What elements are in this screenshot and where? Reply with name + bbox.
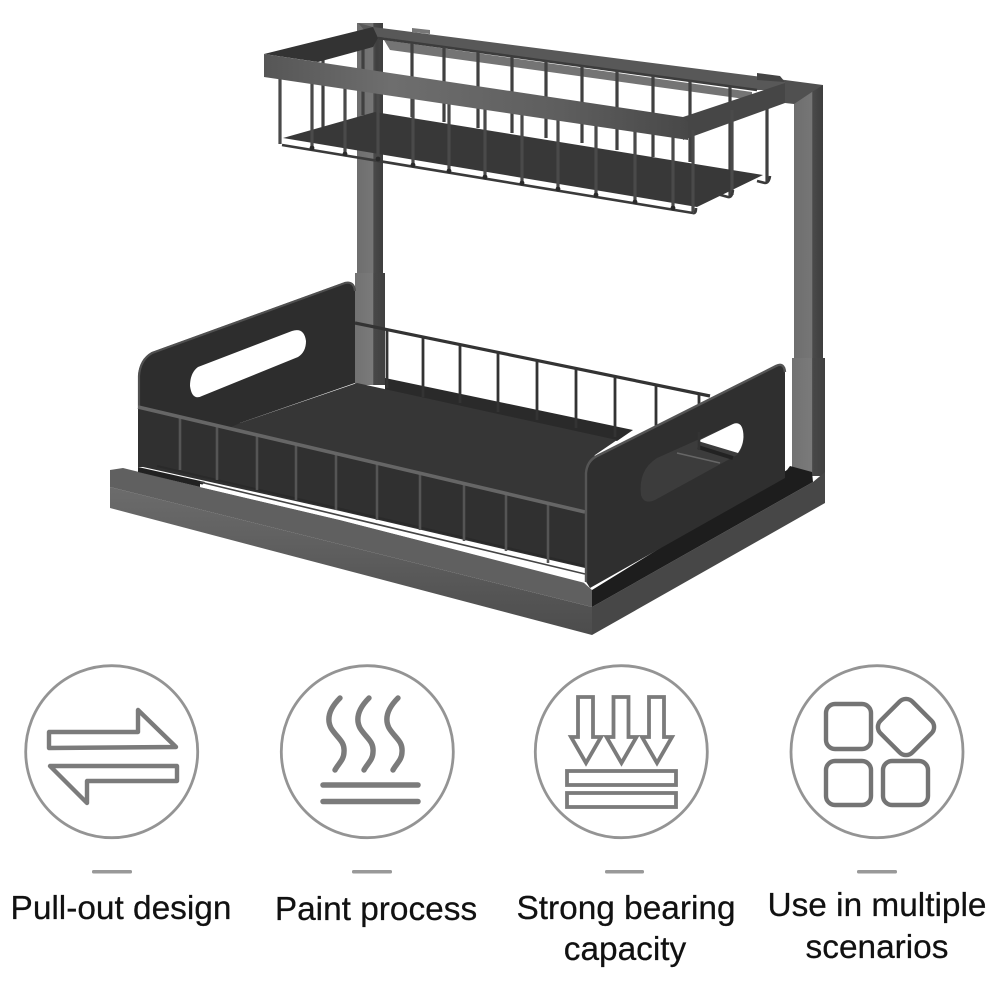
drawer front wire section [138, 407, 585, 583]
left drawer panel [138, 282, 355, 467]
upper basket [264, 23, 785, 213]
back band [358, 23, 785, 90]
icon: bearing capacity [535, 666, 707, 838]
right base face [592, 472, 825, 635]
drawer back rail and wires [355, 323, 710, 440]
base front upper step [110, 468, 592, 607]
right post [785, 80, 825, 476]
drawer floor back edge [385, 378, 633, 441]
dash 1 [92, 870, 132, 874]
dash 3 [605, 870, 644, 874]
drawer floor [138, 383, 617, 512]
icon: multiple scenarios [791, 666, 963, 838]
label: strong bearing capacity [516, 890, 736, 968]
back wire rail [378, 38, 757, 90]
base [110, 466, 825, 635]
right rim side [683, 83, 785, 140]
back wires [323, 38, 767, 197]
label: strong bearing capacity: Strong bearing [516, 890, 736, 927]
plate under back wire [384, 40, 752, 100]
label: use in multiple scenarios: scenarios [806, 929, 948, 966]
bottom wire [282, 145, 693, 213]
base front lower step [110, 487, 592, 635]
front rim band [264, 54, 688, 140]
hook dots [310, 146, 675, 210]
black channel [592, 466, 813, 607]
label: use in multiple scenarios [768, 887, 986, 966]
front wires [280, 70, 770, 213]
label: use in multiple scenarios: Use in multiple [768, 887, 986, 924]
front rail [138, 407, 585, 512]
product: pull-out rack [110, 23, 825, 635]
white gap [200, 484, 585, 583]
left rim side [264, 27, 378, 62]
icon: pull-out arrows [26, 666, 198, 838]
label: pull-out design: Pull-out design [11, 890, 231, 927]
label: paint process: Paint process [275, 891, 477, 928]
basket floor [283, 112, 763, 207]
left handle slot [190, 330, 306, 397]
right handle slot [641, 423, 744, 502]
dash 2 [352, 870, 392, 874]
left post [355, 23, 385, 385]
label: strong bearing capacity: capacity [564, 931, 687, 968]
dash 4 [857, 870, 897, 874]
icon: paint process heat [281, 666, 453, 838]
right drawer panel [585, 365, 785, 588]
